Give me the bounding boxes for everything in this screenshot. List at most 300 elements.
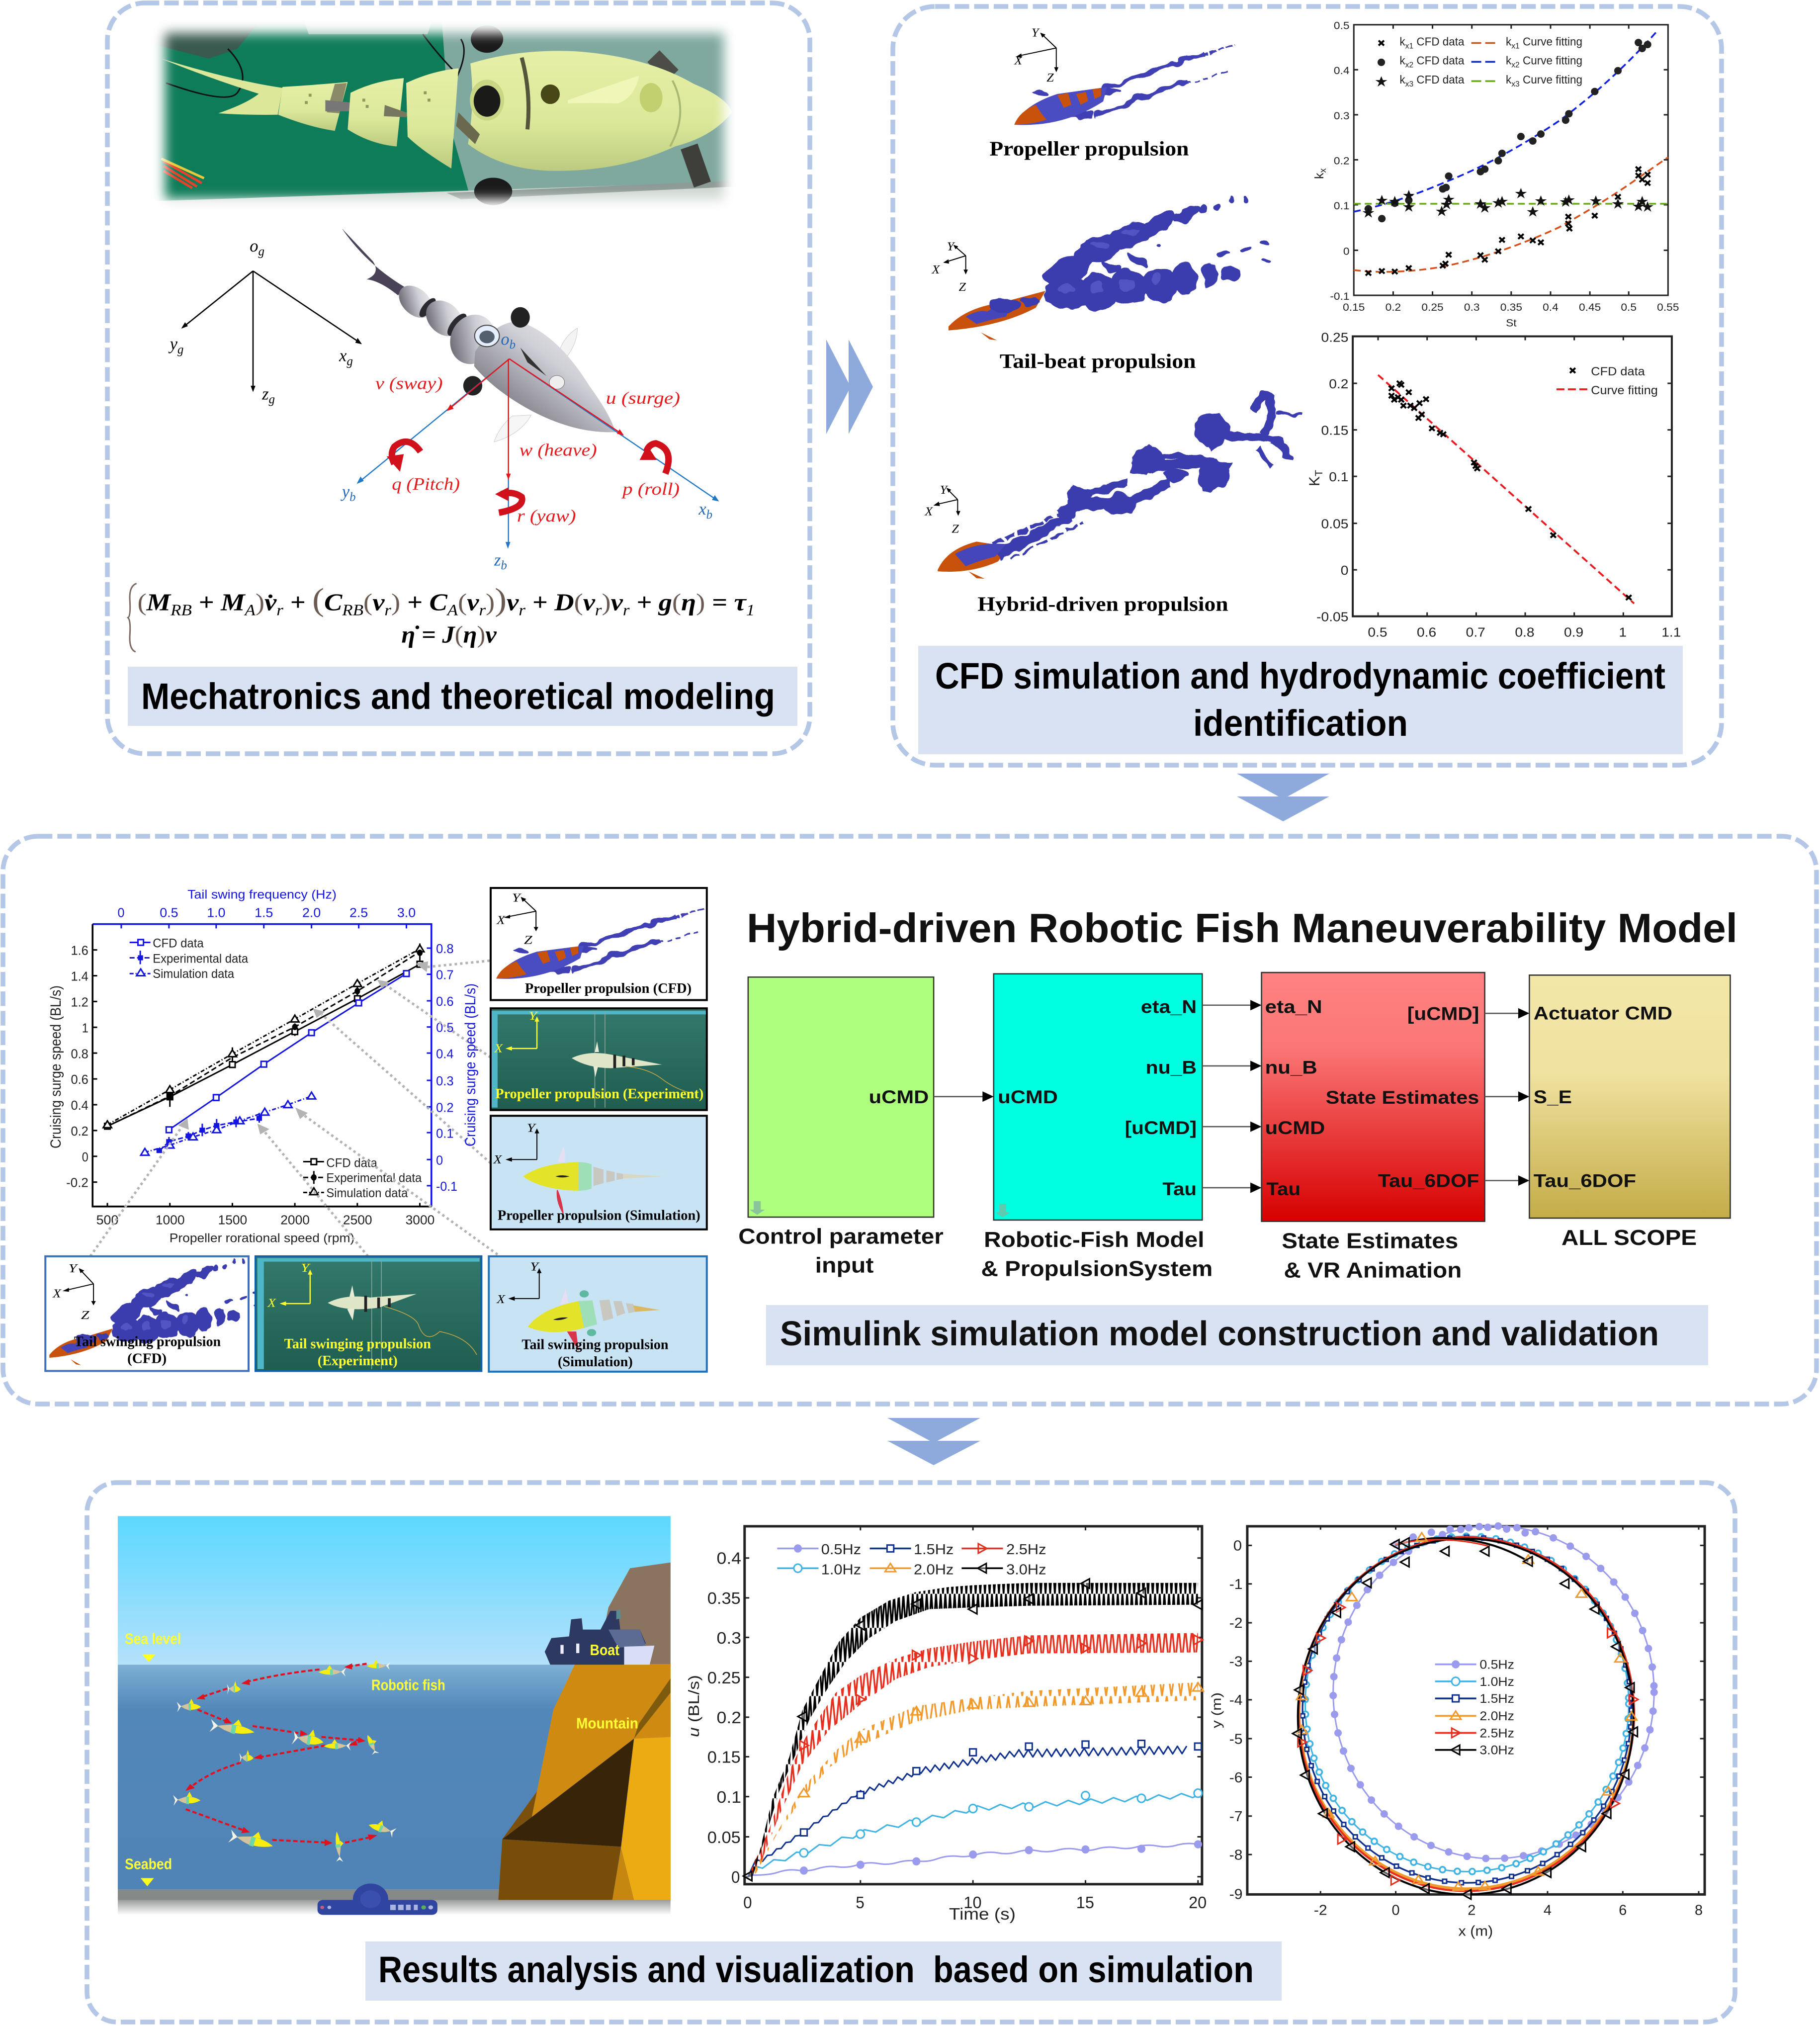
CAD model of the robotic fish <box>342 229 615 442</box>
equation of motion: ) <box>602 589 611 616</box>
chart: k_x versus St: 0 <box>1343 245 1350 257</box>
axis label: K_T: T <box>1313 470 1325 476</box>
equation of motion: r <box>595 601 603 619</box>
callout pointer heads <box>178 962 428 1135</box>
simulator toolbar <box>318 1883 437 1915</box>
chart: cruising surge speed: 0.8 <box>71 1047 88 1061</box>
body axes and motion labels: w (heave) <box>520 440 597 459</box>
CFD: propeller propulsion: Z <box>1046 72 1054 85</box>
body axes and motion labels: b <box>349 490 356 504</box>
chart: turning trajectories: x (m) <box>1458 1923 1493 1939</box>
CFD: tail-beat propulsion: X <box>931 264 941 276</box>
block: control parameter input: input <box>815 1253 873 1277</box>
equation of motion: r <box>623 601 630 619</box>
chart: surge speed over time: 0.3 <box>717 1629 741 1647</box>
body axes and motion labels: o <box>501 329 510 349</box>
block: state estimates and VR animation: State Estimates <box>1326 1087 1479 1108</box>
chart: surge speed over time: 5 <box>856 1893 865 1912</box>
chart: K_T fit: 0.25 <box>1321 331 1348 345</box>
chart: cruising surge speed: 0.6 <box>436 995 453 1009</box>
equation of motion: r <box>276 601 284 619</box>
equation of motion: + D <box>525 589 574 616</box>
banner: simulink simulation model construction and validation <box>766 1305 1708 1365</box>
block: state estimates and VR animation <box>1262 972 1485 1282</box>
robotic fish positions: Robotic fish <box>371 1677 445 1693</box>
chart: cruising surge speed: 2000 <box>280 1213 310 1228</box>
chart: K_T fit: CFD data <box>1591 365 1645 378</box>
block: all scope: ALL SCOPE <box>1561 1226 1697 1249</box>
chart: turning trajectories: -4 <box>1229 1692 1243 1708</box>
image box: tail swinging simulation: X <box>496 1293 506 1306</box>
block: robotic-fish model <box>981 974 1213 1281</box>
image box: tail swinging CFD: Y <box>69 1262 79 1275</box>
equation of motion: ) <box>256 589 264 616</box>
block: robotic-fish model: [uCMD] <box>1125 1118 1197 1138</box>
scene: virtual reality animation <box>118 1516 671 1915</box>
chart: K_T fit <box>1316 331 1681 639</box>
mountain: Mountain <box>576 1715 638 1732</box>
chart: surge speed over time: 0.35 <box>707 1589 741 1607</box>
equation of motion: (M <box>138 589 168 616</box>
chart: cruising surge speed: 1.2 <box>71 995 88 1010</box>
block: state estimates and VR animation: Tau_6DOF <box>1378 1170 1479 1191</box>
chart: surge speed over time: 1.5Hz <box>914 1542 953 1558</box>
boat <box>545 1609 654 1665</box>
block: state estimates and VR animation: uCMD <box>1265 1118 1325 1138</box>
equation of motion: A <box>244 601 256 619</box>
body axes and motion labels: p (roll) <box>621 479 680 499</box>
chart: surge speed over time: 2.5Hz <box>1006 1542 1046 1558</box>
image box: propeller experiment: Propeller propulsion (Experiment) <box>495 1086 703 1102</box>
CFD: tail-beat propulsion <box>931 196 1271 373</box>
image box: propeller experiment: Y <box>528 1009 539 1023</box>
equation of motion: ( <box>458 589 467 616</box>
body axes and motion labels: r (yaw) <box>517 506 576 526</box>
chart: k_x versus St: 0.2 <box>1334 155 1350 167</box>
image box: tail swinging simulation: Tail swinging propulsion <box>521 1336 669 1352</box>
chart: turning trajectories: -9 <box>1229 1886 1243 1902</box>
chart: turning trajectories: -7 <box>1229 1809 1243 1824</box>
chart: surge speed over time: 20 <box>1189 1893 1207 1912</box>
chart: surge speed over time: 0.15 <box>707 1748 741 1766</box>
body axes and motion labels: y <box>342 481 349 501</box>
chart: turning trajectories: 1.5Hz <box>1479 1692 1514 1706</box>
chart: surge speed over time: 0 <box>743 1893 752 1912</box>
chart: turning trajectories: -6 <box>1229 1770 1243 1785</box>
equation of motion: v <box>611 589 621 616</box>
chart: k_x versus St: k <box>1506 74 1512 87</box>
chart: K_T fit: -0.05 <box>1316 610 1348 624</box>
chart: cruising surge speed: 0.4 <box>71 1099 88 1113</box>
block: control parameter input: Control parameter <box>738 1225 944 1248</box>
chart: k_x versus St: -0.1 <box>1330 290 1350 302</box>
arrow: right double chevron <box>826 340 873 434</box>
image box: propeller simulation: X <box>493 1153 503 1166</box>
chart: surge speed over time: 0.4 <box>717 1549 741 1567</box>
CFD: propeller propulsion: Y <box>1032 27 1040 39</box>
chart: k_x versus St: Curve fitting <box>1520 54 1582 67</box>
chart: cruising surge speed: -0.2 <box>66 1176 88 1190</box>
chart: surge speed over time: 2.0Hz <box>914 1562 953 1578</box>
chart: k_x versus St: 0.5 <box>1621 301 1637 313</box>
image box: propeller experiment: X <box>494 1042 504 1056</box>
chart: turning trajectories: 8 <box>1695 1902 1703 1918</box>
banner: CFD simulation and hydrodynamic coefficient identification: CFD simulation and hydrodynamic coefficient <box>935 655 1665 697</box>
chart: surge speed over time: 0.5Hz <box>821 1542 861 1558</box>
chart: k_x versus St <box>1330 20 1679 329</box>
chart: cruising surge speed: Simulation data <box>153 967 235 981</box>
equation of motion: (η) = τ <box>672 589 741 616</box>
image box: tail swinging CFD: Z <box>81 1309 89 1322</box>
global coordinate frame: o <box>250 236 258 256</box>
chart: cruising surge speed: 1.4 <box>71 969 88 984</box>
chart: k_x versus St: x3 <box>1511 80 1520 88</box>
chart: k_x versus St: k <box>1399 74 1406 87</box>
arrow: down double chevron to simulink panel <box>1237 774 1329 821</box>
block: robotic-fish model: nu_B <box>1146 1057 1197 1077</box>
axis label: k_x: k <box>1312 173 1326 179</box>
chart: cruising surge speed: 2500 <box>343 1213 372 1228</box>
equation of motion: r <box>519 601 526 619</box>
chart: k_x versus St: x1 <box>1405 41 1413 50</box>
axis label: y m: y (m) <box>1209 1692 1224 1728</box>
block: robotic-fish model: uCMD <box>998 1086 1058 1107</box>
image box: propeller CFD: Propeller propulsion (CFD) <box>525 980 692 996</box>
chart: cruising surge speed: Simulation data <box>326 1186 408 1200</box>
body axes and motion labels: b <box>706 508 712 522</box>
chart: K_T fit: 0.05 <box>1321 517 1348 531</box>
CFD: propeller propulsion: X <box>1014 54 1023 67</box>
chart: cruising surge speed: 0.4 <box>436 1047 453 1061</box>
panel: CFD simulation and hydrodynamic coefficient identification <box>893 6 1722 765</box>
chart: k_x versus St: Curve fitting <box>1520 35 1582 48</box>
chart: turning trajectories: 6 <box>1619 1902 1627 1918</box>
image box: tail swinging experiment <box>256 1256 481 1371</box>
equation of motion: r <box>479 601 486 619</box>
seabed marker <box>125 1856 172 1886</box>
chart: cruising surge speed: 0.1 <box>436 1127 453 1141</box>
chart: k_x versus St: 0.2 <box>1386 301 1401 313</box>
global coordinate frame: g <box>177 343 183 356</box>
callout pointers <box>90 961 498 1256</box>
chart: cruising surge speed: 0.8 <box>436 942 453 956</box>
block: control parameter input: uCMD <box>869 1086 929 1107</box>
panel frame <box>107 3 810 754</box>
sea level marker <box>125 1631 181 1662</box>
image box: tail swinging simulation: Y <box>530 1260 540 1274</box>
block: all scope: Tau_6DOF <box>1534 1170 1636 1191</box>
chart: surge speed over time: 0.1 <box>717 1788 741 1806</box>
body axes and motion labels: x <box>698 499 706 519</box>
chart: k_x versus St: 0.3 <box>1464 301 1480 313</box>
body axes and motion labels: b <box>501 559 507 572</box>
banner: results analysis and visualization based on simulation <box>365 1941 1282 2001</box>
seabed marker: Seabed <box>125 1856 172 1872</box>
chart: k_x versus St: 0.55 <box>1657 301 1679 313</box>
axis label: K_T: K <box>1306 476 1323 486</box>
chart: surge speed over time: 0 <box>731 1868 740 1886</box>
image box: propeller CFD: Y <box>512 891 522 904</box>
chart: k_x versus St: 0.25 <box>1421 301 1444 313</box>
chart: k_x versus St: Curve fitting <box>1520 74 1582 87</box>
chart: cruising surge speed: 0.7 <box>436 968 453 982</box>
image box: propeller CFD: X <box>496 914 506 927</box>
chart: k_x versus St: 0.15 <box>1343 301 1365 313</box>
equation of motion: v̇ <box>264 589 275 616</box>
image box: tail swinging CFD: X <box>52 1287 62 1301</box>
equation of motion: + C <box>406 589 441 616</box>
image box: tail swinging CFD <box>45 1256 260 1371</box>
chart: surge speed over time: 15 <box>1076 1893 1094 1912</box>
chart: k_x versus St: CFD data <box>1413 54 1465 67</box>
chart: cruising surge speed: CFD data <box>326 1156 378 1170</box>
panel: mechatronics and theoretical modeling <box>107 3 810 754</box>
chart: turning trajectories: -2 <box>1229 1615 1243 1631</box>
equation of motion: + <box>283 589 312 616</box>
chart: turning trajectories <box>1229 1526 1705 1939</box>
chart: k_x versus St: k <box>1506 54 1512 67</box>
panel: simulink simulation model construction and validation <box>3 836 1817 1404</box>
chart: cruising surge speed: 3.0 <box>397 906 416 920</box>
panel frame <box>87 1483 1735 2022</box>
CFD: propeller propulsion: Propeller propulsion <box>989 137 1189 160</box>
chart: turning trajectories: -2 <box>1314 1902 1327 1918</box>
chart: K_T fit: 0.1 <box>1329 470 1348 484</box>
equation of motion: v <box>467 589 477 616</box>
axis label: right surge speed: Cruising surge speed (BL/s) <box>462 983 479 1146</box>
global coordinate frame: g <box>269 393 275 406</box>
chart: cruising surge speed: 2.5 <box>349 906 368 920</box>
equation of motion: 1 <box>746 601 755 619</box>
chart: K_T fit: 0.9 <box>1564 625 1583 639</box>
chart: k_x versus St: x1 <box>1511 41 1520 50</box>
CFD: tail-beat propulsion: Z <box>959 281 966 294</box>
chart: cruising surge speed: 1000 <box>156 1213 185 1228</box>
arrow: down double chevron to results panel <box>887 1418 980 1465</box>
CFD: hybrid-driven propulsion: X <box>924 506 934 518</box>
CFD: hybrid-driven propulsion: Y <box>940 484 949 497</box>
equation of motion: + M <box>192 589 246 616</box>
chart: K_T fit: 1 <box>1619 625 1627 639</box>
chart: turning trajectories: -1 <box>1229 1577 1243 1592</box>
banner: mechatronics and theoretical modeling: Mechatronics and theoretical modeling <box>141 676 775 717</box>
axis label: u BL/s: u (BL/s) <box>685 1675 702 1737</box>
global coordinate frame: y <box>170 334 177 353</box>
CFD: hybrid-driven propulsion <box>924 396 1300 616</box>
banner: results analysis and visualization based on simulation: Results analysis and visualization based on simulation <box>378 1949 1254 1990</box>
chart: k_x versus St: 0.5 <box>1334 20 1350 31</box>
chart: K_T fit: Curve fitting <box>1591 384 1658 397</box>
image box: tail swinging experiment: X <box>267 1297 277 1310</box>
chart: cruising surge speed: 0.5 <box>436 1021 453 1035</box>
title: Hybrid-driven Robotic Fish Maneuverability Model: Hybrid-driven Robotic Fish Maneuverability Model <box>747 905 1737 951</box>
image box: propeller simulation: Propeller propulsion (Simulation) <box>498 1207 700 1223</box>
chart: k_x versus St: k <box>1399 35 1406 48</box>
robotic fish positions <box>173 1660 445 1862</box>
block: state estimates and VR animation: Tau <box>1266 1178 1300 1199</box>
global coordinate frame: x <box>339 346 347 365</box>
image box: tail swinging CFD: Tail swinging propulsion <box>74 1334 221 1350</box>
chart: cruising surge speed: 1.6 <box>71 944 88 958</box>
equation of motion: A <box>446 601 458 619</box>
image box: tail swinging simulation: (Simulation) <box>558 1354 633 1370</box>
block: robotic-fish model: eta_N <box>1141 996 1197 1017</box>
chart: k_x versus St: x2 <box>1405 60 1413 69</box>
banner: simulink simulation model construction and validation: Simulink simulation model construction and validation <box>780 1314 1659 1353</box>
chart: surge speed over time: 0.25 <box>707 1669 741 1687</box>
block: control parameter input <box>738 977 944 1277</box>
equation of motion: RB <box>342 601 363 619</box>
image box: tail swinging CFD: (CFD) <box>127 1350 167 1367</box>
chart: k_x versus St: 0.1 <box>1334 200 1350 212</box>
sea level marker: Sea level <box>125 1631 181 1647</box>
panel frame <box>893 6 1722 765</box>
image box: propeller simulation <box>491 1116 707 1230</box>
CFD: hybrid-driven propulsion: Hybrid-driven propulsion <box>977 593 1228 616</box>
global coordinate frame <box>169 236 362 406</box>
chart: cruising surge speed: 0.2 <box>71 1124 88 1139</box>
chart: turning trajectories: -8 <box>1229 1847 1243 1863</box>
chart: K_T fit: 0.5 <box>1368 625 1387 639</box>
chart: turning trajectories: 2.5Hz <box>1479 1726 1514 1740</box>
trajectory arrows <box>185 1664 377 1846</box>
block: state estimates and VR animation: [uCMD] <box>1407 1003 1479 1024</box>
chart: k_x versus St: 0.3 <box>1334 110 1350 122</box>
chart: cruising surge speed: Tail swing frequency (Hz) <box>187 888 337 902</box>
chart: k_x versus St: 0.35 <box>1500 301 1522 313</box>
chart: k_x versus St: 0.4 <box>1543 301 1559 313</box>
block: state estimates and VR animation: & VR Animation <box>1284 1258 1462 1282</box>
image box: propeller CFD <box>491 888 707 1000</box>
body axes and motion labels <box>341 329 719 572</box>
panel: results analysis and visualization <box>87 1483 1735 2022</box>
chart: turning trajectories: 3.0Hz <box>1479 1744 1514 1757</box>
equation of motion: r <box>384 601 392 619</box>
image box: tail swinging experiment: (Experiment) <box>318 1353 398 1369</box>
body axes and motion labels: v (sway) <box>375 373 443 393</box>
chart: turning trajectories: -5 <box>1229 1731 1243 1747</box>
block: robotic-fish model: & PropulsionSystem <box>981 1257 1213 1281</box>
chart: surge speed over time: 0.2 <box>717 1709 741 1727</box>
block: robotic-fish model: Robotic-Fish Model <box>984 1228 1205 1251</box>
signal arrows <box>934 1000 1529 1193</box>
block: all scope: Actuator CMD <box>1534 1003 1672 1023</box>
chart: turning trajectories: 4 <box>1544 1902 1552 1918</box>
block: all scope <box>1529 975 1730 1249</box>
chart: cruising surge speed: CFD data <box>153 937 204 951</box>
equation of motion: v <box>372 589 383 616</box>
CFD: propeller propulsion <box>989 27 1236 160</box>
body axes and motion labels: b <box>510 338 516 352</box>
image box: tail swinging simulation <box>489 1256 707 1372</box>
equation of motion: ) <box>486 589 495 616</box>
chart: k_x versus St: CFD data <box>1413 74 1465 87</box>
global coordinate frame: g <box>347 354 353 368</box>
image box: tail swinging experiment: Y <box>301 1261 311 1275</box>
chart: K_T fit: 0.7 <box>1466 625 1485 639</box>
chart: cruising surge speed: 1.0 <box>207 906 225 920</box>
chart: cruising surge speed: 0.6 <box>71 1073 88 1087</box>
chart: cruising surge speed: 0.2 <box>436 1101 453 1115</box>
chart: cruising surge speed: 1500 <box>218 1213 247 1228</box>
chart: k_x versus St: k <box>1399 54 1406 67</box>
panel frame <box>3 836 1817 1404</box>
axis label: left surge speed: Cruising surge speed (BL/s) <box>48 985 64 1148</box>
equation of motion: RB <box>170 601 192 619</box>
chart: k_x versus St: CFD data <box>1413 35 1465 48</box>
CFD: hybrid-driven propulsion: Z <box>952 523 959 535</box>
body axes and motion labels: u (surge) <box>606 388 680 408</box>
chart: K_T fit: 0.8 <box>1515 625 1535 639</box>
equation of motion: (C <box>312 582 340 617</box>
chart: cruising surge speed: Experimental data <box>153 952 249 966</box>
boat: Boat <box>590 1642 619 1659</box>
chart: surge speed over time: 3.0Hz <box>1006 1562 1046 1578</box>
chart: K_T fit: 0.2 <box>1329 377 1348 391</box>
chart: k_x versus St: St <box>1506 317 1517 329</box>
chart: K_T fit: 0.6 <box>1417 625 1436 639</box>
chart: cruising surge speed <box>66 888 457 1245</box>
chart: turning trajectories: 0.5Hz <box>1479 1658 1514 1672</box>
block: state estimates and VR animation: State Estimates <box>1282 1229 1458 1253</box>
axis label: k_x: x <box>1318 168 1328 173</box>
chart: k_x versus St: k <box>1506 35 1512 48</box>
equation of motion: (v <box>574 589 594 616</box>
banner: mechatronics and theoretical modeling <box>128 667 797 726</box>
chart: surge speed over time: 1.0Hz <box>821 1562 861 1578</box>
chart: turning trajectories: 2.0Hz <box>1479 1709 1514 1723</box>
chart: K_T fit: 1.1 <box>1661 625 1681 639</box>
banner: CFD simulation and hydrodynamic coefficient identification <box>918 646 1683 754</box>
equation of motion: η̇ = J(η)v <box>401 621 497 648</box>
block: state estimates and VR animation: nu_B <box>1265 1057 1317 1077</box>
chart: turning trajectories: 2 <box>1468 1902 1475 1918</box>
chart: cruising surge speed: 1 <box>82 1021 88 1035</box>
equation of motion <box>128 582 755 652</box>
photo: robotic fish prototype <box>152 19 737 210</box>
chart: surge speed over time: 0.05 <box>707 1828 741 1847</box>
chart: cruising surge speed: 2.0 <box>302 906 321 920</box>
chart: k_x versus St: 0.45 <box>1579 301 1601 313</box>
body axes and motion labels: q (Pitch) <box>392 474 460 494</box>
global coordinate frame: z <box>262 384 269 403</box>
chart: k_x versus St: x3 <box>1405 80 1413 88</box>
block: state estimates and VR animation: eta_N <box>1265 996 1322 1017</box>
chart: cruising surge speed: 0 <box>436 1153 443 1167</box>
equation of motion: ( <box>363 589 372 616</box>
global coordinate frame: g <box>258 245 264 259</box>
mountain <box>498 1563 671 1900</box>
chart: cruising surge speed: 0.5 <box>160 906 178 920</box>
chart: surge speed over time: 10 <box>963 1893 982 1912</box>
chart: surge speed over time: Time (s) <box>949 1905 1016 1923</box>
chart: cruising surge speed: 1.5 <box>255 906 273 920</box>
chart: cruising surge speed: Experimental data <box>326 1171 422 1185</box>
image box: propeller simulation: Y <box>527 1122 537 1135</box>
body axes and motion labels: z <box>494 550 501 569</box>
chart: turning trajectories: -3 <box>1229 1654 1243 1670</box>
CFD: tail-beat propulsion: Y <box>947 240 955 253</box>
block: robotic-fish model: Tau <box>1162 1178 1197 1199</box>
equation of motion: )v <box>495 582 517 617</box>
image box: propeller experiment <box>491 1008 707 1110</box>
image box: tail swinging experiment: Tail swinging propulsion <box>284 1336 431 1352</box>
equation of motion: ) <box>391 589 400 616</box>
chart: surge speed over time <box>707 1526 1207 1923</box>
chart: cruising surge speed: -0.1 <box>436 1179 457 1194</box>
equation of motion: + g <box>629 589 672 616</box>
chart: turning trajectories: 0 <box>1392 1902 1400 1918</box>
